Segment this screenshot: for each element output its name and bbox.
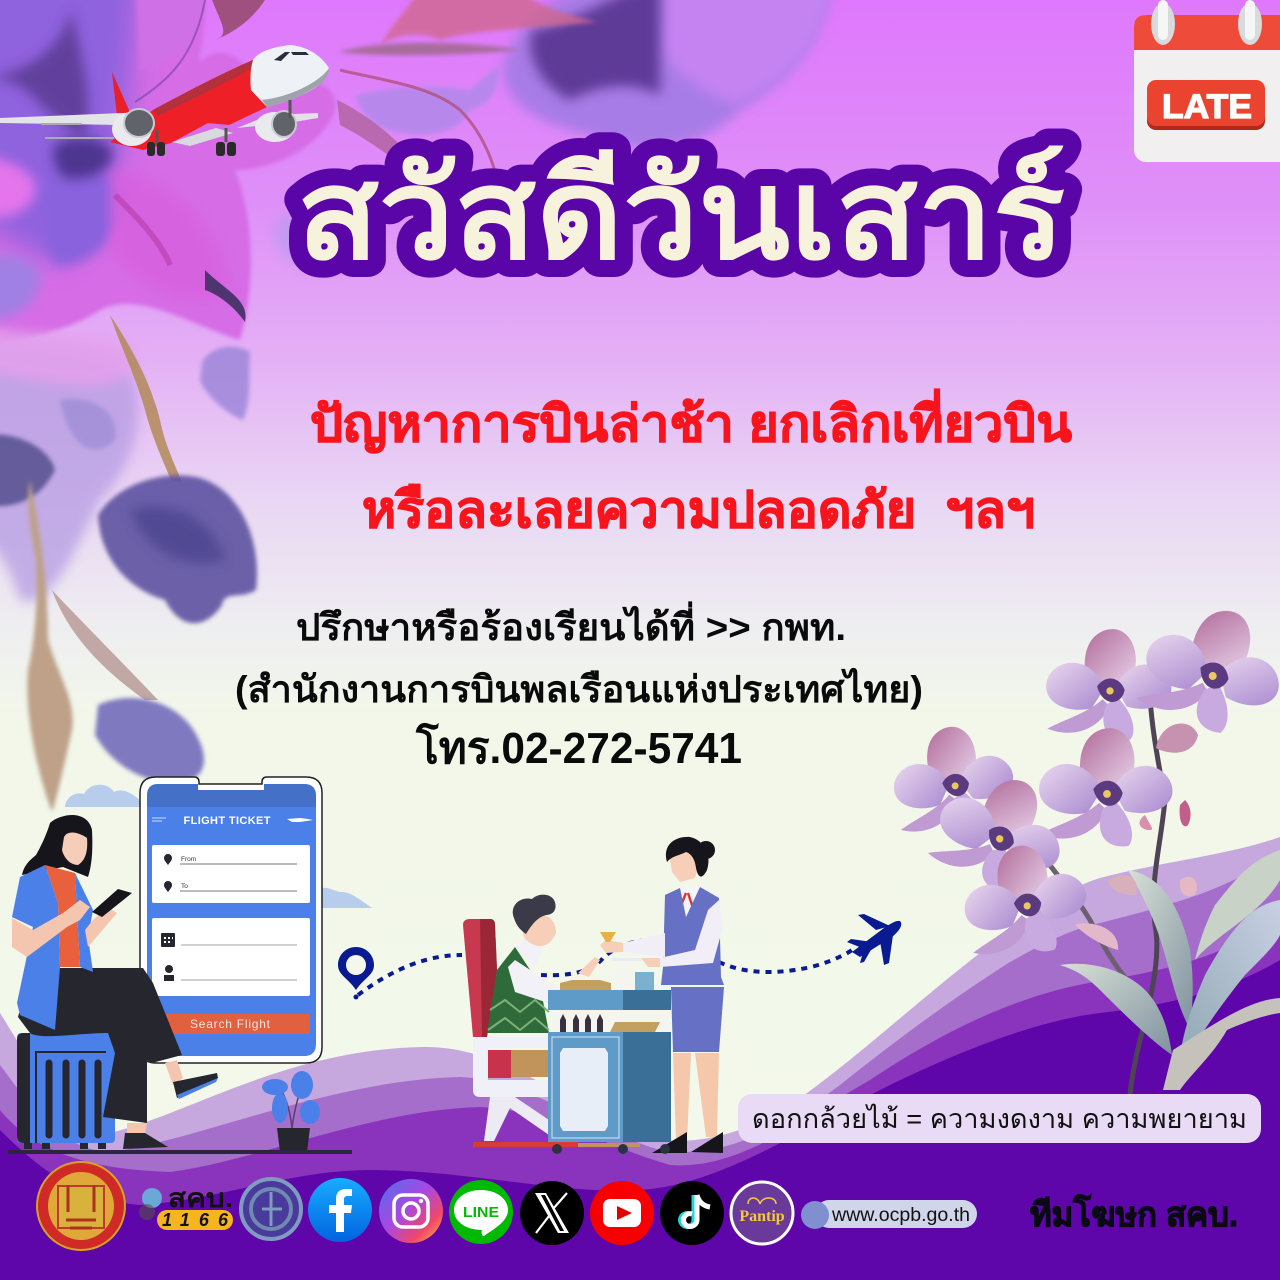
- footer logo: 1166: สคบ.: [168, 1183, 233, 1213]
- icon: YouTube: [590, 1181, 654, 1245]
- note pill: orchid meaning: [738, 1094, 1261, 1143]
- icon: Pantip: Pantip: [739, 1208, 785, 1225]
- phone: flight ticket app: FLIGHT TICKET: [184, 815, 271, 827]
- watercolor flower: top centre: [274, 0, 830, 272]
- footer credit: ทีมโฆษก สคบ.: [1030, 1194, 1238, 1234]
- icon: blue plane: [847, 914, 901, 965]
- phone: flight ticket app: [140, 777, 322, 1063]
- contact text: โทร.02-272-5741: [415, 721, 742, 773]
- watercolor flowers: left side: [0, 315, 257, 812]
- icon: LINE: LINE: [463, 1204, 499, 1221]
- icon: LATE calendar: [1134, 0, 1280, 162]
- footer logo: OCPB: [241, 1179, 301, 1239]
- layered purple waves: [0, 837, 1280, 1280]
- icon: TikTok: [660, 1181, 724, 1245]
- red heading: [310, 389, 1072, 538]
- footer seal: [36, 1161, 126, 1251]
- icon: LATE calendar: LATE: [1162, 88, 1252, 126]
- footer logo: 1166: 1166: [162, 1210, 229, 1230]
- watercolor flower: top left: [0, 0, 335, 350]
- clouds: [65, 785, 372, 908]
- floor line: [8, 1150, 352, 1154]
- phone: flight ticket app: To: [181, 883, 188, 890]
- flight attendant: [600, 837, 724, 1153]
- travel route dashed line: [358, 940, 852, 995]
- note pill: orchid meaning: ดอกกล้วยไม้ = ความงดงาม ความพยายาม: [752, 1104, 1247, 1134]
- icon: Instagram: [379, 1179, 443, 1243]
- icon: Facebook: [308, 1178, 372, 1242]
- icon: Pantip: [731, 1182, 793, 1244]
- title: สวัสดีวันเสาร์: [297, 144, 1065, 285]
- woman sitting on suitcase: [12, 815, 218, 1149]
- footer logo: 1166: [139, 1183, 233, 1230]
- airplane: [0, 45, 329, 156]
- contact text: (สำนักงานการบินพลเรือนแห่งประเทศไทย): [235, 667, 923, 710]
- icon: location pin: [338, 947, 374, 1000]
- airplane seat and passenger: [463, 895, 640, 1147]
- phone: flight ticket app: From: [181, 856, 196, 863]
- plant in pot: [262, 1071, 320, 1152]
- website pill: www.ocpb.go.th: [831, 1205, 970, 1226]
- contact text: ปรึกษาหรือร้องเรียนได้ที่ >> กพท.: [296, 601, 846, 648]
- phone: flight ticket app: Search Flight: [190, 1017, 271, 1031]
- icon: X: [520, 1181, 584, 1245]
- title: สวัสดีวันเสาร์: [297, 144, 1065, 285]
- icon: LINE: [449, 1180, 513, 1244]
- red heading: หรือละเลยความปลอดภัย ฯลฯ: [362, 482, 1035, 538]
- food trolley: [548, 967, 671, 1154]
- website pill: [801, 1200, 977, 1229]
- red heading: ปัญหาการบินล่าช้า ยกเลิกเที่ยวบิน: [310, 389, 1072, 453]
- orchid branch: [886, 593, 1280, 1095]
- contact text: [235, 601, 923, 773]
